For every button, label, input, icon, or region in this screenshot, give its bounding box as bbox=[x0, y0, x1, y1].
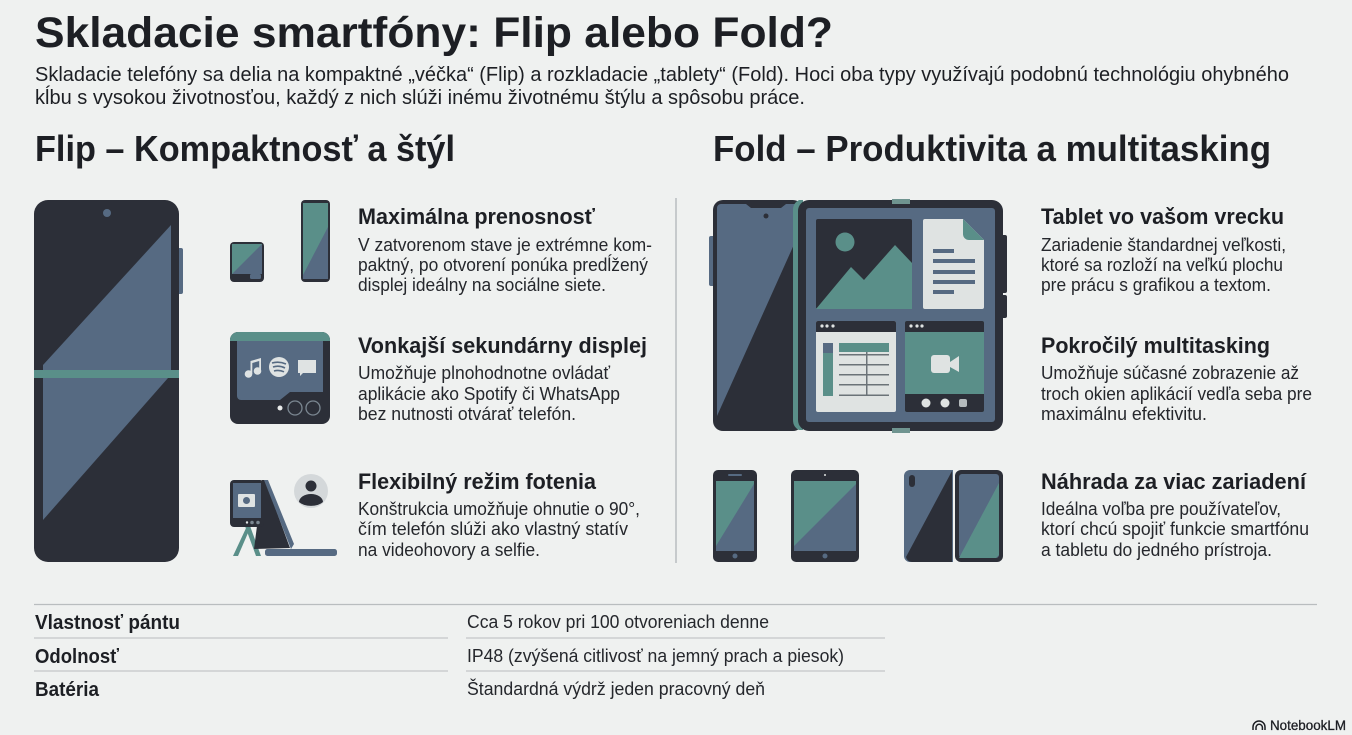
feature: Tablet vo vašom vrecku: Tablet vo vašom vrecku bbox=[1041, 204, 1284, 229]
feature: Pokročilý multitasking bbox=[1041, 333, 1312, 424]
icon: flip phone in selfie stand mode bbox=[230, 480, 337, 556]
icon: spotify bbox=[269, 357, 289, 377]
feature: Pokročilý multitasking: maximálnu efektivitu. bbox=[1041, 404, 1207, 424]
icon: tablet bbox=[791, 470, 859, 562]
intro text bbox=[35, 64, 1289, 109]
feature: Tablet vo vašom vrecku: ktoré sa rozloží na veľkú plochu bbox=[1041, 255, 1283, 275]
feature: Flexibilný režim fotenia bbox=[358, 469, 640, 560]
feature: Maximálna prenosnosť bbox=[358, 204, 652, 295]
feature: Náhrada za viac zariadení: Náhrada za viac zariadení bbox=[1041, 469, 1307, 494]
table: row hinge: Cca 5 rokov pri 100 otvoreniach denne bbox=[467, 612, 769, 632]
icon: music note bbox=[245, 358, 261, 378]
table: row hinge: Vlastnosť pántu bbox=[35, 612, 180, 634]
feature: Pokročilý multitasking: Umožňuje súčasné zobrazenie až bbox=[1041, 363, 1299, 383]
feature: Flexibilný režim fotenia: čím telefón slúži ako vlastný statív bbox=[358, 519, 628, 539]
logo: NotebookLM: NotebookLM bbox=[1270, 717, 1346, 733]
feature: Vonkajší sekundárny displej bbox=[358, 333, 647, 424]
window: video call bbox=[905, 321, 984, 412]
icon: opened flip phone bbox=[301, 200, 330, 282]
feature: Maximálna prenosnosť: Maximálna prenosnosť bbox=[358, 204, 595, 229]
icon: video call avatar bbox=[294, 474, 328, 508]
feature: Náhrada za viac zariadení: a tabletu do jedného prístroja. bbox=[1041, 540, 1272, 560]
illustration: large open flip phone bbox=[34, 200, 183, 562]
table: row durability bbox=[35, 646, 844, 668]
table: row durability: IP48 (zvýšená citlivosť na jemný prach a piesok) bbox=[467, 646, 844, 666]
feature: Vonkajší sekundárny displej: aplikácie ako Spotify či WhatsApp bbox=[358, 384, 620, 404]
intro text: Skladacie telefóny sa delia na kompaktné „véčka“ (Flip) a rozkladacie „tablety“ (Fold). Hoci oba typy využívajú podobnú technológiu ohybného bbox=[35, 64, 1289, 86]
heading: Flip: Flip – Kompaktnosť a štýl bbox=[35, 128, 455, 169]
table: row battery: Štandardná výdrž jeden pracovný deň bbox=[467, 678, 765, 699]
feature: Maximálna prenosnosť: V zatvorenom stave je extrémne kom- bbox=[358, 235, 652, 255]
feature: Náhrada za viac zariadení bbox=[1041, 469, 1309, 560]
feature: Tablet vo vašom vrecku: pre prácu s grafikou a textom. bbox=[1041, 275, 1271, 295]
window: spreadsheet bbox=[816, 321, 896, 412]
feature: Flexibilný režim fotenia: na videohovory a selfie. bbox=[358, 540, 540, 560]
title: Skladacie smartfóny: Flip alebo Fold? bbox=[35, 9, 833, 57]
table: row battery bbox=[35, 678, 765, 701]
window: document bbox=[923, 219, 984, 309]
heading: Fold: Fold – Produktivita a multitasking bbox=[713, 128, 1271, 169]
feature: Maximálna prenosnosť: displej ideálny na sociálne siete. bbox=[358, 275, 606, 295]
table: row battery: Batéria bbox=[35, 679, 100, 701]
feature: Vonkajší sekundárny displej: Umožňuje plnohodnotne ovládať bbox=[358, 363, 610, 383]
table: row durability: Odolnosť bbox=[35, 646, 119, 668]
table: row hinge bbox=[35, 612, 769, 634]
feature: Náhrada za viac zariadení: ktorí chcú spojiť funkcie smartfónu bbox=[1041, 519, 1309, 539]
feature: Flexibilný režim fotenia: Konštrukcia umožňuje ohnutie o 90°, bbox=[358, 499, 640, 519]
feature: Pokročilý multitasking: Pokročilý multitasking bbox=[1041, 333, 1270, 358]
feature: Flexibilný režim fotenia: Flexibilný režim fotenia bbox=[358, 469, 597, 494]
feature: Náhrada za viac zariadení: Ideálna voľba pre používateľov, bbox=[1041, 499, 1281, 519]
feature: Tablet vo vašom vrecku bbox=[1041, 204, 1286, 295]
feature: Pokročilý multitasking: troch okien aplikácií vedľa seba pre bbox=[1041, 384, 1312, 404]
illustration: open fold phone bbox=[709, 199, 1007, 433]
window: image bbox=[816, 219, 912, 309]
icon: cover display bbox=[230, 332, 330, 424]
icon: folded flip phone bbox=[230, 242, 264, 282]
feature: Vonkajší sekundárny displej: bez nutnosti otvárať telefón. bbox=[358, 404, 576, 424]
icon: fold device bbox=[904, 470, 1003, 562]
feature: Tablet vo vašom vrecku: Zariadenie štandardnej veľkosti, bbox=[1041, 235, 1286, 255]
feature: Vonkajší sekundárny displej: Vonkajší sekundárny displej bbox=[358, 333, 647, 358]
icon: chat bubble bbox=[298, 360, 316, 376]
icon: smartphone bbox=[713, 470, 757, 562]
intro text: kĺbu s vysokou životnosťou, každý z nich slúži inému životnému štýlu a spôsobu práce. bbox=[35, 85, 805, 109]
feature: Maximálna prenosnosť: paktný, po otvorení ponúka predĺžený bbox=[358, 254, 648, 275]
